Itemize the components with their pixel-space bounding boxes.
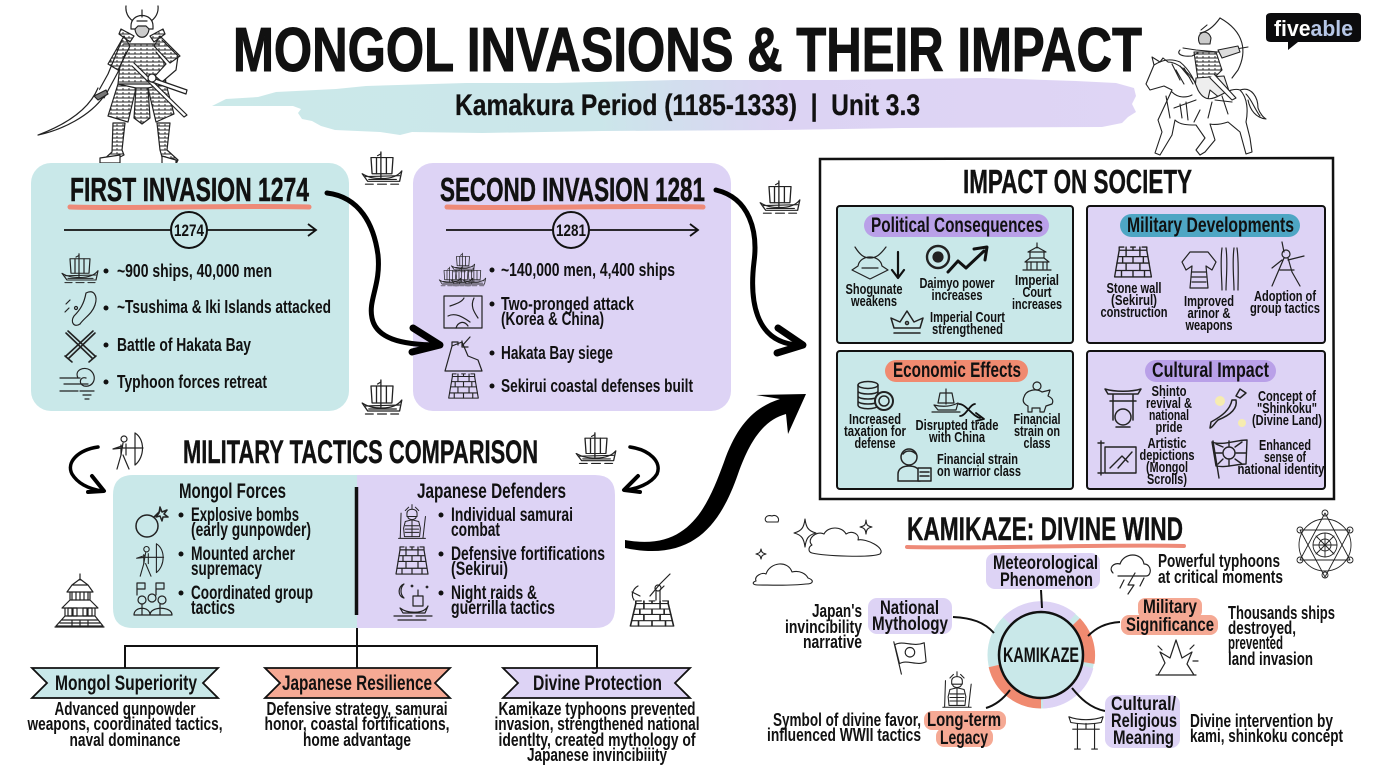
text: divine intervention: Divine intervention by bbox=[1190, 711, 1333, 731]
pill: political consequences: Political Consequences bbox=[871, 214, 1043, 237]
node: long-term legacy: Legacy bbox=[940, 728, 988, 749]
pill: military developments: Military Developments bbox=[1127, 214, 1294, 237]
bullets: Mounted archer bbox=[191, 544, 295, 565]
timeline 1281 bbox=[446, 212, 698, 248]
arrow: tactics to impact bbox=[625, 394, 806, 551]
labels: sense of bbox=[1264, 449, 1307, 466]
bullet list: ~Tsushima & Iki Islands attacked bbox=[117, 297, 331, 317]
bullet list: ~140,000 men, 4,400 ships bbox=[501, 260, 675, 280]
labels: (Sekirul) bbox=[1111, 292, 1157, 309]
icon: disrupted trade ship bbox=[932, 389, 984, 421]
text: mongol superiority: weapons, coordinated tactics, bbox=[27, 714, 223, 734]
subtitle brush stroke bbox=[212, 78, 1136, 135]
icon: crossed swords bbox=[65, 331, 96, 362]
ribbon: divine protection: Divine Protection bbox=[533, 672, 662, 695]
timeline 1281: 1281 bbox=[556, 221, 586, 240]
heading: second invasion: SECOND INVASION 1281 bbox=[440, 171, 705, 208]
logo: fiveable bbox=[1266, 13, 1361, 50]
icon: coordinated group bbox=[134, 583, 172, 615]
labels: Court bbox=[1022, 284, 1052, 301]
text: invincibility narrative: narrative bbox=[803, 632, 862, 652]
timeline 1274 bbox=[64, 212, 316, 248]
panel: impact on society bbox=[820, 158, 1334, 499]
timeline 1274: 1274 bbox=[174, 221, 204, 240]
column: mongol forces: Mongol Forces bbox=[179, 480, 286, 503]
illustration: mounted archer bbox=[1146, 18, 1266, 155]
icon: businessman bbox=[898, 449, 931, 481]
labels: (Divine Land) bbox=[1252, 412, 1322, 429]
icon: ship top bbox=[362, 152, 402, 184]
icon: armor and swords bbox=[1182, 248, 1238, 290]
labels bbox=[846, 272, 1062, 338]
text: divine intervention bbox=[1190, 711, 1343, 746]
panel: first invasion bbox=[31, 163, 349, 411]
node: military significance bbox=[1121, 597, 1218, 636]
icon: ship bottom bbox=[362, 380, 402, 414]
ribbon: japanese resilience: Japanese Resilience bbox=[282, 672, 432, 695]
icon: castle left bbox=[55, 574, 104, 627]
labels: Adoption of bbox=[1254, 288, 1317, 305]
bullet list: Hakata Bay siege bbox=[501, 343, 613, 363]
node: meteorological phenomenon bbox=[986, 553, 1100, 591]
card: military developments bbox=[1087, 206, 1325, 343]
labels: with China bbox=[928, 429, 985, 446]
text: mongol superiority bbox=[27, 699, 223, 750]
icon: rising sun flag bbox=[1212, 440, 1247, 478]
labels bbox=[1140, 383, 1325, 488]
bullets bbox=[178, 505, 313, 619]
bullet list: Two-pronged attack bbox=[501, 294, 635, 314]
node: military significance: Military bbox=[1143, 597, 1197, 618]
labels: on warrior class bbox=[937, 463, 1021, 480]
labels: Imperial bbox=[1015, 272, 1059, 289]
labels: strengthened bbox=[932, 321, 1003, 338]
icon: crown bbox=[891, 311, 923, 333]
text: invincibility narrative: Japan's bbox=[812, 601, 862, 621]
icon: night raid ship bbox=[394, 584, 432, 620]
icon: typhoon bbox=[60, 368, 94, 399]
arrow: first to second invasion bbox=[327, 193, 440, 352]
text: japanese resilience: honor, coastal fortifications, bbox=[264, 714, 450, 734]
icon: fleet bbox=[439, 253, 486, 286]
text: typhoons: Powerful typhoons bbox=[1158, 551, 1280, 571]
heading: kamikaze divine wind: KAMIKAZE: DIVINE WIND bbox=[907, 511, 1183, 547]
icon: torii and orb bbox=[1105, 389, 1141, 427]
labels: Daimyo power bbox=[920, 275, 995, 292]
logo: fiveable: fiveable bbox=[1274, 16, 1353, 41]
bullet list: ~900 ships, 40,000 men bbox=[117, 261, 272, 281]
column: japanese defenders bbox=[394, 480, 605, 620]
bullets: tactics bbox=[191, 598, 235, 619]
pill: economic effects: Economic Effects bbox=[893, 359, 1021, 382]
text: ships destroyed: land invasion bbox=[1228, 649, 1313, 669]
labels: Imperial Court bbox=[930, 309, 1005, 326]
icon: ship right bbox=[760, 181, 800, 213]
text: divine protection: Japanese invincibiiity bbox=[527, 745, 667, 765]
hub: kamikaze bbox=[993, 607, 1090, 703]
icon: fortification wall bbox=[396, 547, 428, 574]
bullet list bbox=[104, 261, 331, 392]
ribbon: japanese resilience bbox=[265, 668, 450, 698]
labels: national bbox=[1149, 407, 1189, 424]
text: mongol superiority: naval dominance bbox=[70, 730, 180, 750]
labels: pride bbox=[1156, 419, 1182, 436]
icon: soldier on wall bbox=[630, 574, 674, 626]
bullets: Night raids & bbox=[451, 583, 537, 604]
icon: japan map bbox=[1210, 389, 1246, 428]
icon: islands bbox=[65, 292, 96, 325]
icon: samurai bbox=[399, 505, 425, 538]
icon: japanese flag bbox=[894, 642, 926, 674]
icon: explosion bbox=[1156, 640, 1198, 675]
node: long-term legacy: Long-term bbox=[927, 710, 1001, 731]
text: ships destroyed bbox=[1228, 603, 1335, 669]
node: meteorological phenomenon: Phenomenon bbox=[1000, 570, 1093, 591]
arrow: right curved to tactics bbox=[624, 447, 658, 492]
bullets: combat bbox=[451, 520, 500, 541]
node: meteorological phenomenon: Meteorological bbox=[993, 553, 1098, 574]
icon: piggy bank bbox=[1023, 382, 1053, 412]
text: ships destroyed: prevented bbox=[1228, 633, 1283, 653]
icon: storm cloud bbox=[1111, 555, 1150, 594]
node: national mythology: Mythology bbox=[872, 614, 948, 635]
text: divine protection: identlty, created mythology of bbox=[498, 730, 696, 750]
subtitle: Kamakura Period (1185-1333) | Unit 3.3 bbox=[455, 89, 920, 122]
bullets bbox=[438, 505, 605, 619]
heading: first invasion: FIRST INVASION 1274 bbox=[70, 171, 309, 208]
bullets: (Sekirui) bbox=[451, 559, 508, 580]
labels: increases bbox=[932, 287, 982, 304]
text: invincibility narrative: invincibility bbox=[785, 617, 862, 637]
bullets: Individual samurai bbox=[451, 505, 573, 526]
icon: archer bbox=[113, 433, 143, 469]
icon: two-pronged map bbox=[444, 296, 482, 328]
labels: Scrolls) bbox=[1147, 471, 1187, 488]
bullet list: Typhoon forces retreat bbox=[117, 372, 267, 392]
bullets: (early gunpowder) bbox=[191, 520, 311, 541]
title: MONGOL INVASIONS & THEIR IMPACT bbox=[233, 16, 1142, 85]
labels: depictions bbox=[1140, 447, 1194, 464]
icon: castle bbox=[1023, 243, 1051, 270]
labels: Shogunate bbox=[846, 281, 902, 298]
labels: Artistic bbox=[1148, 435, 1186, 452]
bullets: Explosive bombs bbox=[191, 505, 299, 526]
icon: warrior stance bbox=[1272, 242, 1304, 286]
icon: torii gate bbox=[1069, 717, 1103, 749]
icon: bomb bbox=[136, 507, 168, 537]
text: mongol superiority: Advanced gunpowder bbox=[54, 699, 196, 719]
labels: taxation for bbox=[844, 423, 906, 440]
labels: "Shinkoku" bbox=[1257, 400, 1317, 417]
connector tree bbox=[125, 628, 597, 668]
labels: (Mongol bbox=[1146, 459, 1188, 476]
labels: Stone wall bbox=[1106, 280, 1162, 297]
text: symbol of divine favor: influenced WWII tactics bbox=[767, 725, 921, 745]
bullet list bbox=[490, 260, 693, 396]
icon: war ship bbox=[576, 433, 616, 463]
ribbon: mongol superiority: Mongol Superiority bbox=[55, 672, 197, 695]
text: symbol of divine favor bbox=[767, 710, 921, 745]
node: cultural religious meaning bbox=[1105, 694, 1180, 749]
labels bbox=[1100, 280, 1320, 334]
bullets: Defensive fortifications bbox=[451, 544, 605, 565]
arrow: left curved to tactics bbox=[70, 447, 104, 492]
panel: tactics comparison bbox=[113, 475, 615, 628]
labels: Improved bbox=[1184, 293, 1234, 310]
text: divine protection bbox=[494, 699, 700, 765]
labels: Financial strain bbox=[937, 451, 1018, 468]
bullets: Coordinated group bbox=[191, 583, 313, 604]
icon: sekirui wall bbox=[449, 374, 478, 398]
labels bbox=[844, 411, 1060, 480]
text: divine protection: invasion, strengthened national bbox=[494, 714, 700, 734]
icon: clouds and stars bbox=[753, 515, 881, 585]
labels: Enhanced bbox=[1259, 437, 1311, 454]
labels: Increased bbox=[849, 411, 901, 428]
illustration: samurai warrior bbox=[38, 6, 187, 164]
icon: warrior bbox=[943, 672, 971, 707]
text: japanese resilience: Defensive strategy, samurai bbox=[266, 699, 448, 719]
text: invincibility narrative bbox=[785, 601, 862, 652]
node: military significance: Significance bbox=[1126, 615, 1214, 636]
labels: arinor & bbox=[1188, 305, 1231, 322]
text: japanese resilience bbox=[264, 699, 450, 750]
icon: ship bbox=[62, 254, 98, 283]
pill: cultural impact: Cultural Impact bbox=[1152, 359, 1269, 382]
labels: increases bbox=[1012, 296, 1062, 313]
icon: scroll bbox=[1098, 441, 1136, 475]
column: japanese defenders: Japanese Defenders bbox=[417, 480, 566, 503]
labels: Concept of bbox=[1258, 388, 1317, 405]
labels: Financial bbox=[1014, 411, 1060, 428]
text: ships destroyed: Thousands ships bbox=[1228, 603, 1335, 623]
heading: military tactics comparison: MILITARY TACTICS COMPARISON bbox=[183, 434, 538, 470]
card: cultural impact bbox=[1087, 351, 1325, 489]
icon: coins bbox=[858, 382, 893, 410]
labels: defense bbox=[854, 435, 896, 452]
card: political consequences bbox=[837, 206, 1073, 343]
ribbon: divine protection bbox=[503, 668, 690, 698]
node: cultural religious meaning: Meaning bbox=[1113, 728, 1174, 749]
bullets: supremacy bbox=[191, 559, 262, 580]
bullet list: Battle of Hakata Bay bbox=[117, 335, 251, 355]
text: divine protection: Kamikaze typhoons prevented bbox=[498, 699, 696, 719]
text: ships destroyed: destroyed, bbox=[1228, 618, 1296, 638]
bullet list: Sekirui coastal defenses built bbox=[501, 376, 693, 396]
panel: second invasion bbox=[413, 163, 731, 411]
text: japanese resilience: home advantage bbox=[303, 730, 411, 750]
arrow: second invasion to impact bbox=[716, 190, 803, 353]
ribbon: mongol superiority bbox=[32, 668, 218, 698]
text: symbol of divine favor: Symbol of divine favor, bbox=[773, 710, 921, 730]
labels: construction bbox=[1100, 304, 1168, 321]
labels: Disrupted trade bbox=[916, 417, 998, 434]
icon: mounted archer bbox=[137, 544, 164, 576]
labels: group tactics bbox=[1250, 300, 1320, 317]
node: national mythology bbox=[868, 598, 952, 635]
column: mongol forces bbox=[134, 480, 313, 619]
icon: hakata siege bbox=[445, 337, 482, 371]
labels: weapons bbox=[1185, 317, 1232, 334]
bullet list: (Korea & China) bbox=[501, 309, 604, 329]
icon: sacred geometry bbox=[1297, 510, 1353, 578]
bullets: guerrilla tactics bbox=[451, 598, 555, 619]
labels: class bbox=[1024, 435, 1050, 452]
icon: stone wall bbox=[1115, 247, 1151, 277]
labels: weakens bbox=[850, 293, 897, 310]
heading: impact on society: IMPACT ON SOCIETY bbox=[963, 163, 1192, 200]
labels: revival & bbox=[1146, 395, 1192, 412]
card: economic effects bbox=[837, 351, 1073, 489]
connectors bbox=[953, 590, 1120, 711]
text: typhoons bbox=[1158, 551, 1283, 587]
labels: strain on bbox=[1014, 423, 1060, 440]
icon: daimyo crest and rising arrow bbox=[927, 246, 987, 272]
labels: Shinto bbox=[1152, 383, 1186, 400]
node: cultural religious meaning: Cultural/ bbox=[1111, 694, 1177, 715]
hub: kamikaze: KAMIKAZE bbox=[1003, 644, 1079, 667]
labels: national identity bbox=[1238, 461, 1325, 478]
icon: helmet with down arrow bbox=[852, 247, 904, 279]
node: national mythology: National bbox=[880, 598, 939, 619]
node: cultural religious meaning: Religious bbox=[1111, 711, 1177, 732]
text: typhoons: at critical moments bbox=[1158, 567, 1283, 587]
node: long-term legacy bbox=[924, 710, 1006, 749]
